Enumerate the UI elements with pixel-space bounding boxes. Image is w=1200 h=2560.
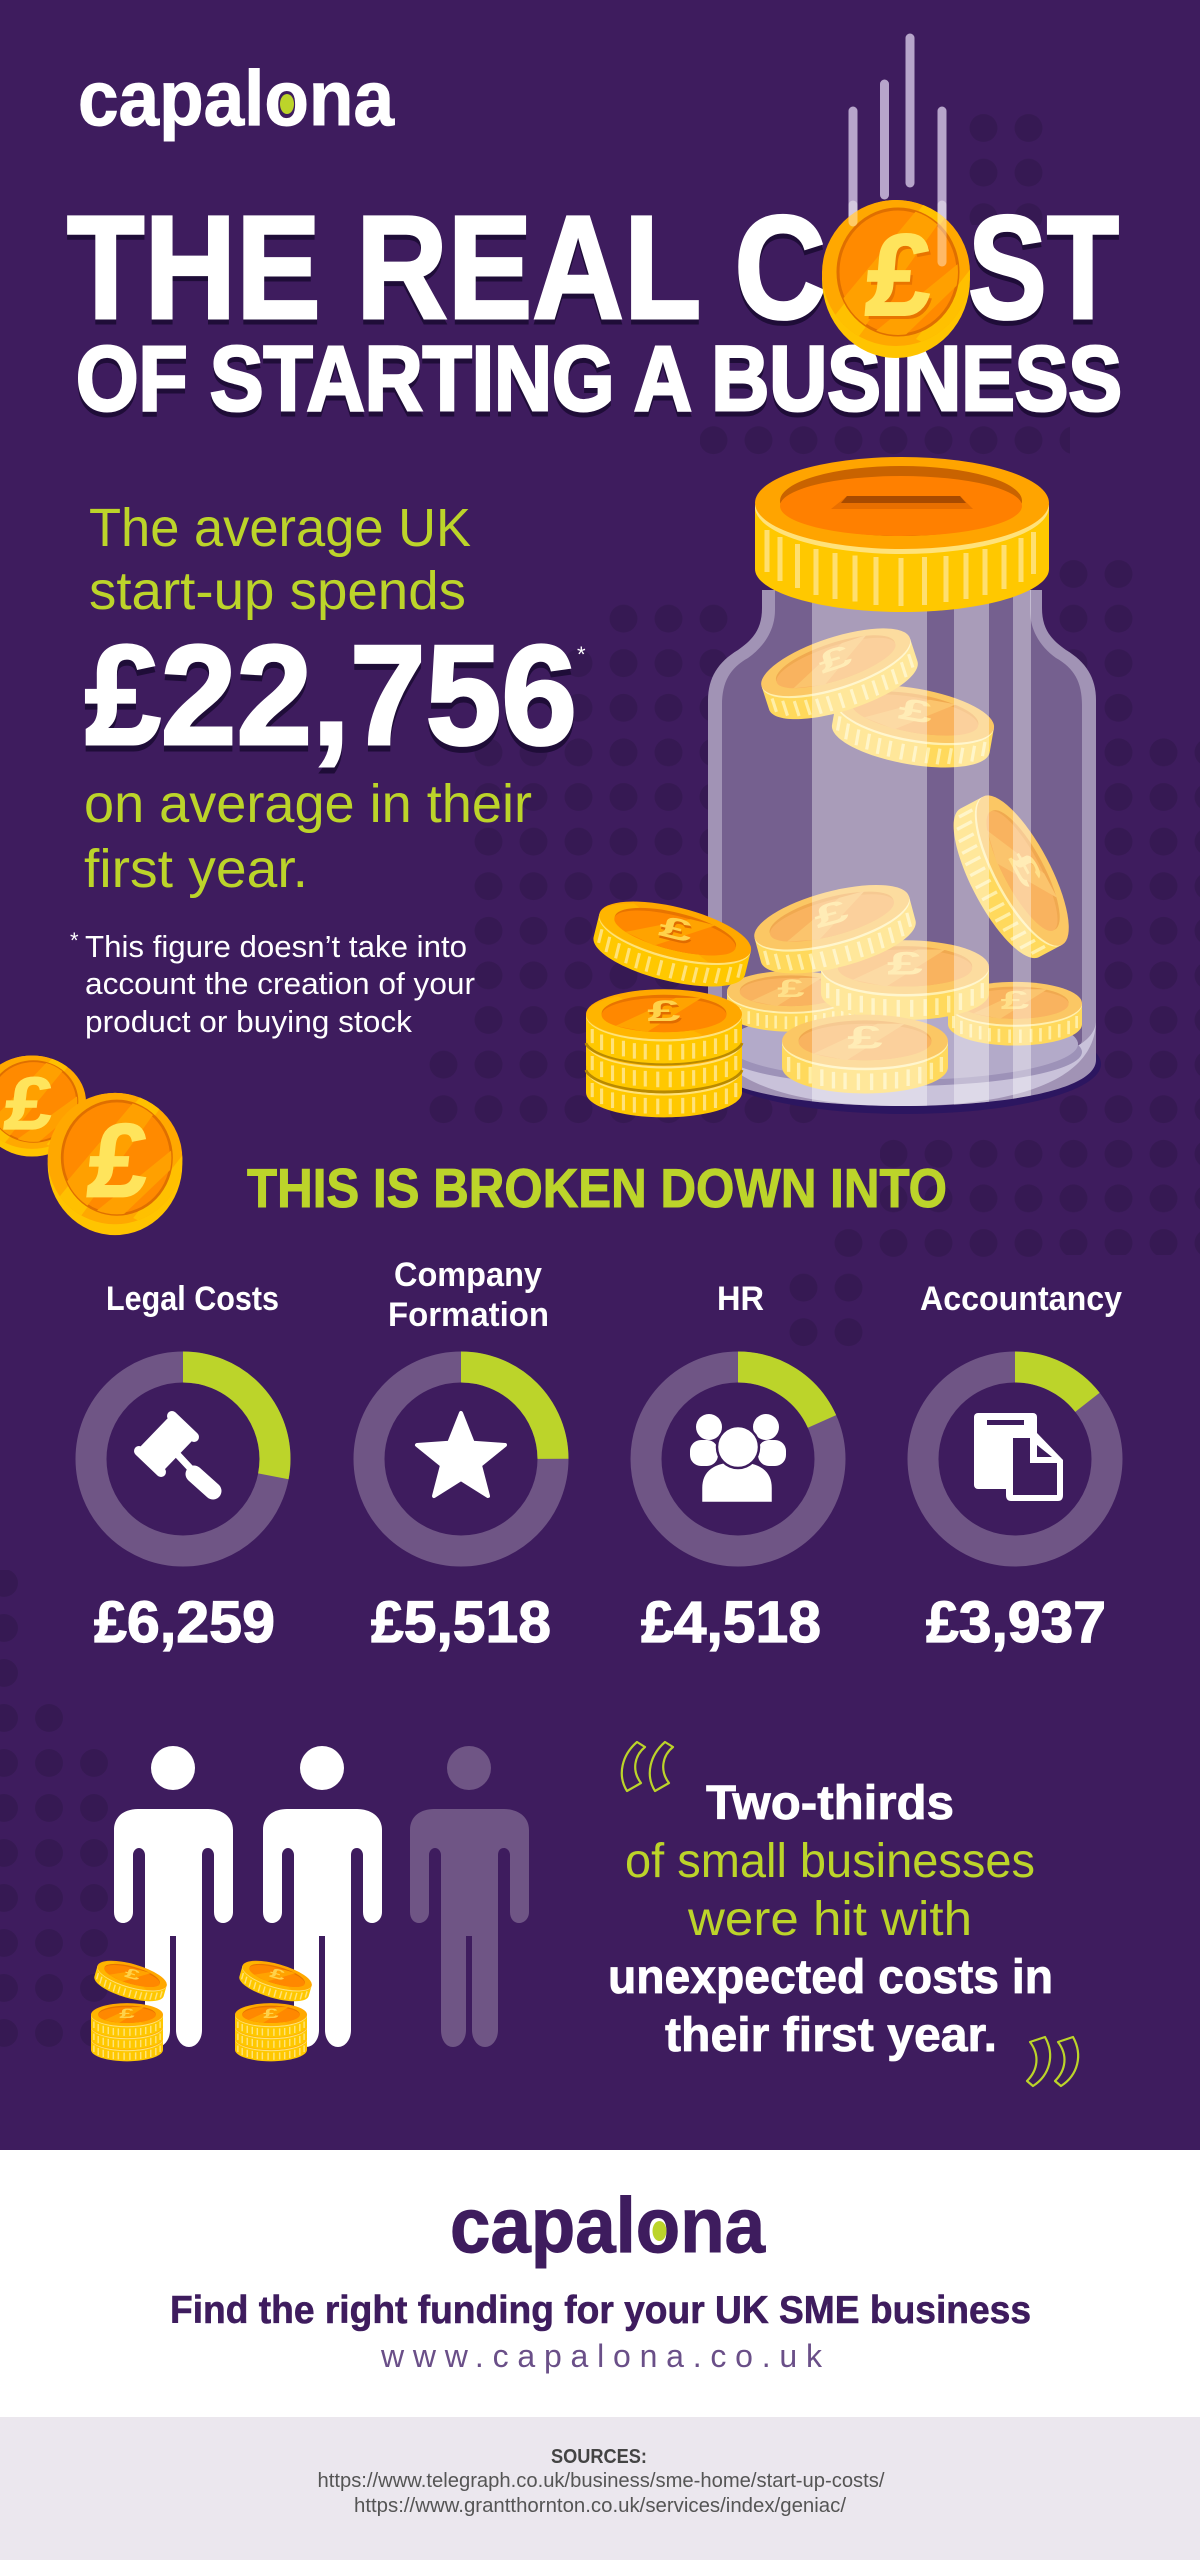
headline statistic text: * [577, 642, 586, 667]
title: THE REAL C [67, 186, 826, 350]
sources panel: https://www.grantthornton.co.uk/services/index/geniac/ [354, 2495, 846, 2517]
illustration: loose coin pile [586, 889, 757, 1117]
quote text [608, 1777, 1053, 2062]
coins inside jar [727, 614, 1086, 1093]
headline statistic text: start-up spends [89, 561, 466, 621]
headline statistic text [84, 498, 586, 899]
footer url: www.capalona.co.uk [380, 2338, 823, 2374]
headline statistic text: on average in their [84, 774, 532, 834]
coins inside jar: £ [887, 945, 923, 981]
illustration: loose coin pile: £ [647, 994, 681, 1028]
item: company formation: Company [394, 1256, 542, 1294]
coins beside person two [235, 1955, 315, 2061]
item: legal costs [91, 1280, 279, 1655]
jar base [708, 1020, 1096, 1106]
sources panel: https://www.telegraph.co.uk/business/sme-home/start-up-costs/ [318, 2470, 885, 2492]
coins inside jar: £ [847, 1019, 883, 1055]
headline statistic text: £22,756 [85, 622, 577, 781]
item: accountancy: Accountancy [920, 1280, 1122, 1318]
illustration: loose coin pile: £ [656, 909, 696, 950]
logo: capalona: capalona [78, 54, 395, 142]
coins inside jar: £ [896, 691, 936, 731]
icon: people [690, 1414, 786, 1503]
title coin: £ [862, 210, 937, 340]
item: company formation [369, 1256, 553, 1655]
coins beside person one: £ [123, 1964, 142, 1984]
coins inside jar: £ [777, 975, 805, 1003]
item: HR: HR [717, 1280, 764, 1318]
pictogram: person one [114, 1746, 233, 2047]
coins inside jar: £ [814, 638, 856, 680]
title: ST [968, 191, 1119, 355]
title: O [840, 186, 960, 350]
title: THE REAL C [67, 191, 826, 355]
item: HR: £4,518 [641, 1590, 821, 1655]
headline statistic text: £22,756 [85, 616, 577, 775]
illustration: left coins: £ [1, 1062, 58, 1145]
falling coin motion lines [853, 38, 942, 262]
item: accountancy: £3,937 [926, 1590, 1106, 1655]
pictogram: person two [263, 1746, 382, 2047]
quote text: of small businesses [625, 1835, 1035, 1888]
item: company formation: Formation [388, 1296, 549, 1334]
sources panel: SOURCES: [551, 2446, 647, 2468]
illustration: loose coin pile: £ [649, 997, 682, 1030]
pictogram: person three [410, 1746, 529, 2047]
quote text: unexpected costs in [608, 1951, 1053, 2004]
footnote: This figure doesn’t take into [85, 929, 467, 964]
title: ST [968, 186, 1119, 350]
glass highlights [812, 590, 1031, 1110]
icon: star [417, 1413, 505, 1496]
coins inside jar: £ [1001, 986, 1030, 1015]
item: company formation: £5,518 [371, 1590, 551, 1655]
footer logo: capalona [450, 2181, 766, 2269]
jar lid [755, 457, 1049, 612]
quote marks [622, 1742, 1078, 2086]
title [67, 186, 1122, 435]
footnote: * [70, 928, 79, 953]
footnote [70, 928, 475, 1039]
illustration: loose coin pile: £ [657, 912, 697, 952]
title coin: £ [865, 214, 940, 344]
jar glass [708, 590, 1096, 1106]
item: accountancy [920, 1280, 1122, 1655]
illustration: left coins [0, 1048, 197, 1235]
motion lines over coin [853, 205, 942, 262]
footnote: product or buying stock [85, 1004, 412, 1039]
item: HR [641, 1280, 830, 1655]
quote text: Two-thirds [706, 1777, 954, 1830]
jar shadow [709, 1014, 1101, 1114]
headline statistic text: first year. [84, 839, 308, 899]
quote text: were hit with [687, 1893, 972, 1946]
quote text: their first year. [665, 2009, 997, 2062]
coins beside person one: £ [119, 2005, 135, 2021]
coins inside jar: £ [1002, 844, 1050, 893]
illustration: left coins: £ [83, 1103, 154, 1219]
title coin [816, 189, 986, 358]
coins beside person two: £ [268, 1964, 287, 1984]
section heading: THIS IS BROKEN DOWN INTO [247, 1157, 947, 1219]
icon: documents [974, 1413, 1063, 1501]
footnote: account the creation of your [85, 966, 475, 1001]
illustration: coin jar [708, 457, 1101, 1114]
headline statistic text: The average UK [89, 498, 471, 558]
icon: gavel [139, 1416, 213, 1491]
title: O [840, 191, 960, 355]
coins beside person two: £ [263, 2005, 279, 2021]
item: legal costs: £6,259 [94, 1590, 275, 1655]
coins inside jar: £ [810, 893, 852, 935]
coins beside person one [91, 1955, 170, 2061]
footer tagline: Find the right funding for your UK SME business [170, 2289, 1031, 2332]
footer panel [0, 2150, 1200, 2417]
item: legal costs: Legal Costs [106, 1280, 279, 1318]
sources panel [0, 2417, 1200, 2560]
